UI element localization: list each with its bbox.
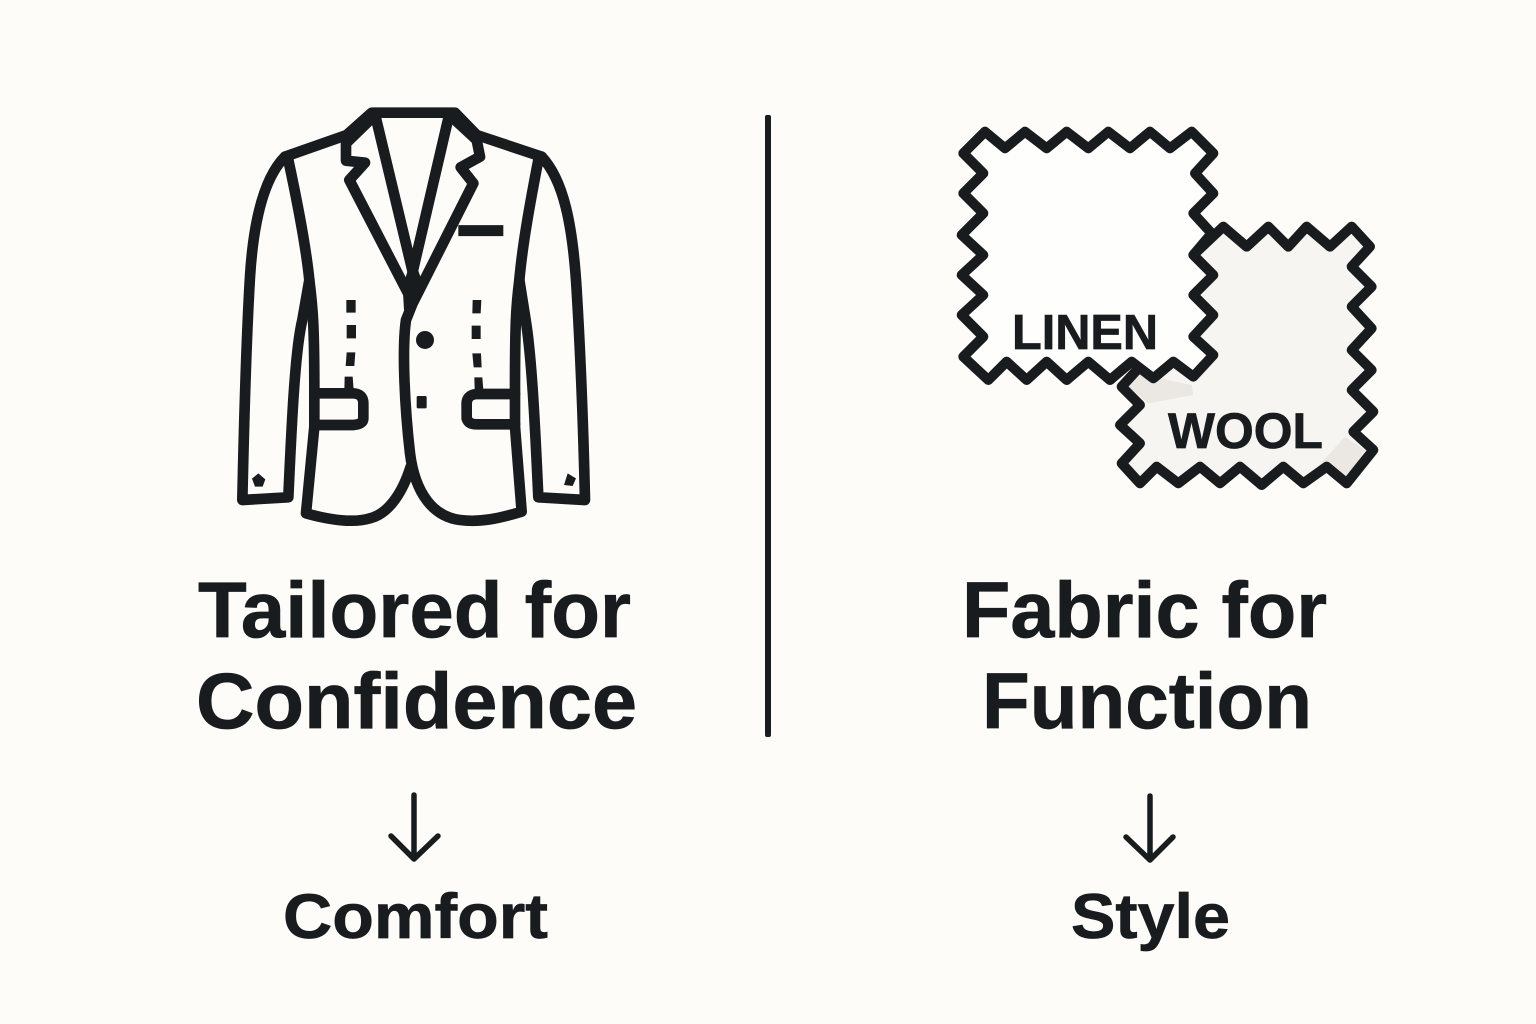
divider: [765, 115, 771, 737]
arrow: to Comfort: [391, 795, 438, 859]
swatch label: WOOL: WOOL: [1168, 403, 1323, 459]
icon: fabric swatches: [962, 132, 1373, 485]
swatch: wool: [1120, 227, 1373, 485]
heading: Tailored for Confidence: Tailored for: [198, 565, 631, 654]
heading: Fabric for Function: [962, 565, 1327, 745]
swatch label: LINEN: LINEN: [1012, 306, 1158, 360]
swatch: linen: [962, 132, 1213, 380]
heading: Fabric for Function: Function: [982, 656, 1312, 745]
icon: tailored jacket: [242, 113, 585, 521]
cuff button: right: [564, 473, 576, 486]
left stitching dashes: [344, 300, 356, 390]
label: Style: Style: [1071, 882, 1230, 952]
arrow: to Style: [1126, 796, 1173, 860]
cuff button: left: [252, 473, 265, 487]
heading: Fabric for Function: Fabric for: [962, 565, 1327, 654]
right stitching dashes: [472, 300, 483, 390]
label: Comfort: Comfort: [283, 882, 548, 952]
button: upper: [416, 331, 434, 349]
heading: Tailored for Confidence: [196, 565, 637, 745]
button: lower: [417, 396, 427, 408]
heading: Tailored for Confidence: Confidence: [196, 656, 637, 745]
